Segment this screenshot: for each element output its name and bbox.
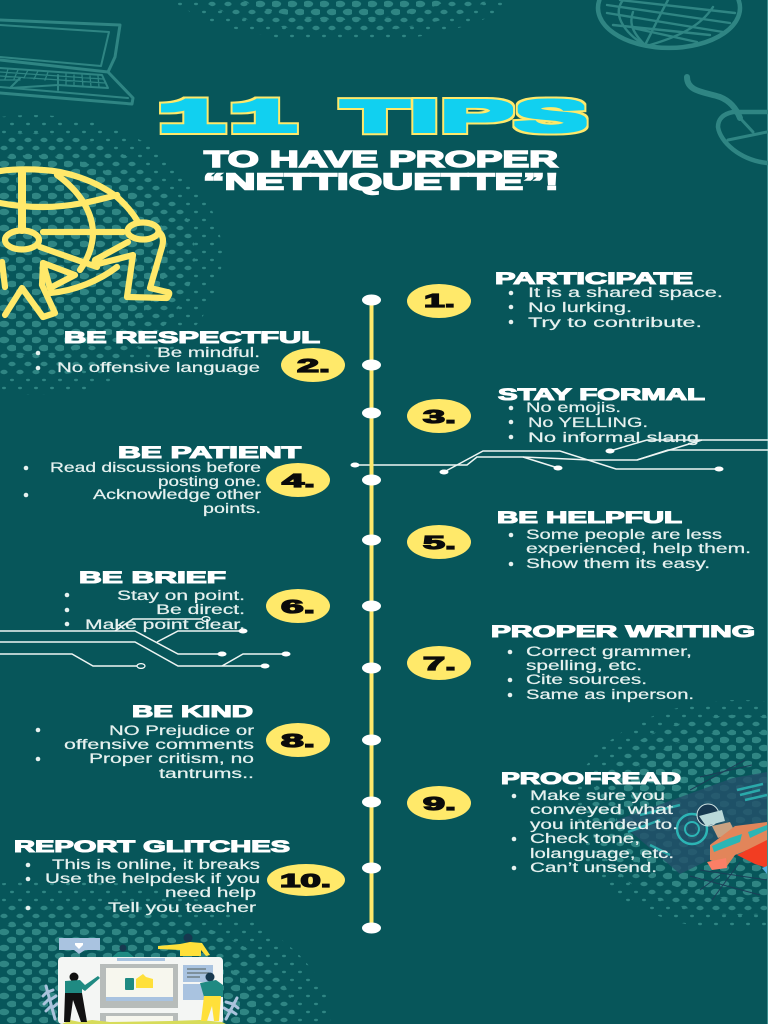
tip 8: be kind [36,702,330,781]
tip 4: be patient: 4. [282,470,315,491]
figure: man in yellow on top [158,934,210,956]
tip 10: report glitches: This is online, it breaks [52,857,260,872]
tip 7: proper writing: Same as inperson. [526,687,694,702]
tip 1: participate: Try to contribute. [528,315,702,330]
subtitle [203,146,559,194]
title [156,92,588,145]
tip 5: be helpful: Some people are less [526,527,722,542]
tip 7: proper writing [407,622,755,702]
halftone: bottom right [570,700,768,930]
tip 4: be patient: points. [203,501,261,516]
tip 1: participate: 1. [424,290,455,311]
tip 5: be helpful: BE HELPFUL [497,508,682,527]
tip 4: be patient: posting one. [158,474,261,489]
title: 11 [156,93,299,145]
tip 2: be respectful: No offensive language [57,360,260,375]
tip 4: be patient [24,443,330,516]
tip 3: stay formal: No informal slang [528,430,699,445]
tip 1: participate: It is a shared space. [528,285,723,300]
tip 3: stay formal [407,385,705,445]
tip 7: proper writing: 7. [423,653,456,674]
tip 6: be brief: BE BRIEF [79,568,226,587]
plants [43,986,238,1019]
icon: globe outline top right [598,0,740,48]
tip 1: participate [407,269,723,330]
tip 6: be brief: Be direct. [156,602,245,617]
tip 6: be brief: Make point clear. [85,617,245,632]
tip 10: report glitches: need help [165,885,256,900]
tip 4: be patient: BE PATIENT [118,443,302,462]
tip 3: stay formal: 3. [423,406,456,427]
tip 3: stay formal: No YELLING. [528,415,648,430]
tip 3: stay formal: STAY FORMAL [498,385,705,404]
tip 8: be kind: BE KIND [132,702,253,721]
tip 9: proofread: 9. [423,793,456,814]
tip 10: report glitches [14,837,345,915]
tip 2: be respectful [36,328,345,382]
tip 5: be helpful: Show them its easy. [526,556,710,571]
figure: man in teal on right [200,972,223,1021]
tip 8: be kind: offensive comments [64,737,254,752]
tip 8: be kind: 8. [281,730,315,751]
tip 10: report glitches: Use the helpdesk if you [45,871,260,886]
tip 7: proper writing: Cite sources. [526,672,647,687]
tip 1: participate: No lurking. [528,300,632,315]
tip 9: proofread: conveyed what [530,802,673,817]
tip 4: be patient: Read discussions before [50,460,261,475]
tip 1: participate: PARTICIPATE [495,269,693,288]
tip 5: be helpful [407,508,751,571]
tip 7: proper writing: PROPER WRITING [491,622,755,641]
tip 8: be kind: Proper critism, no [89,751,254,766]
tip 6: be brief [65,568,330,632]
tip 9: proofread [407,769,681,875]
tip 8: be kind: NO Prejudice or [109,723,255,738]
subtitle: “NETTIQUETTE”! [203,168,559,194]
tip 7: proper writing: Correct grammer, [526,644,692,659]
figure: woman with tablet [64,972,100,1022]
illustration: VR user with holographic panel [617,760,767,900]
tip 7: proper writing: spelling, etc. [526,658,642,673]
halftone: left globe [0,115,222,395]
tip 4: be patient: Acknowledge other [93,487,262,502]
subtitle: TO HAVE PROPER [204,146,558,172]
tip 10: report glitches: 10. [280,870,331,891]
tip 10: report glitches: Tell you teacher [108,900,257,915]
tip 2: be respectful: 2. [297,355,330,376]
title: TIPS [341,92,588,141]
tip 9: proofread: lolanguage, etc. [530,846,674,861]
icon: yellow globe held by people [0,169,169,317]
tip 9: proofread: Can’t unsend. [530,860,657,875]
tip 2: be respectful: BE RESPECTFUL [64,328,320,347]
tip 6: be brief: Stay on point. [117,588,245,603]
halftone: bottom left [0,880,330,1024]
figure: small head behind card [112,944,134,957]
tip 6: be brief: 6. [281,596,315,617]
tip 9: proofread: you intended to. [530,817,678,832]
circuit lines left [0,617,290,668]
tip 2: be respectful: Be mindful. [157,345,260,360]
tip 8: be kind: tantrums.. [159,766,254,781]
tip 5: be helpful: experienced, help them. [526,541,751,556]
icon: laptop outline [0,20,133,104]
tip 9: proofread: Check tone, [530,831,640,846]
circuit lines right [350,440,768,474]
right edge line [767,0,768,1024]
tip 5: be helpful: 5. [423,532,456,553]
tip 9: proofread: PROOFREAD [501,769,681,788]
tip 9: proofread: Make sure you [530,788,665,803]
tip 3: stay formal: No emojis. [526,400,621,415]
halftone: top centre [172,0,518,42]
illustration: people around website card [43,934,238,1024]
icon: computer mouse outline [687,77,767,163]
timeline [362,294,381,934]
tip 10: report glitches: REPORT GLITCHES [14,837,290,856]
